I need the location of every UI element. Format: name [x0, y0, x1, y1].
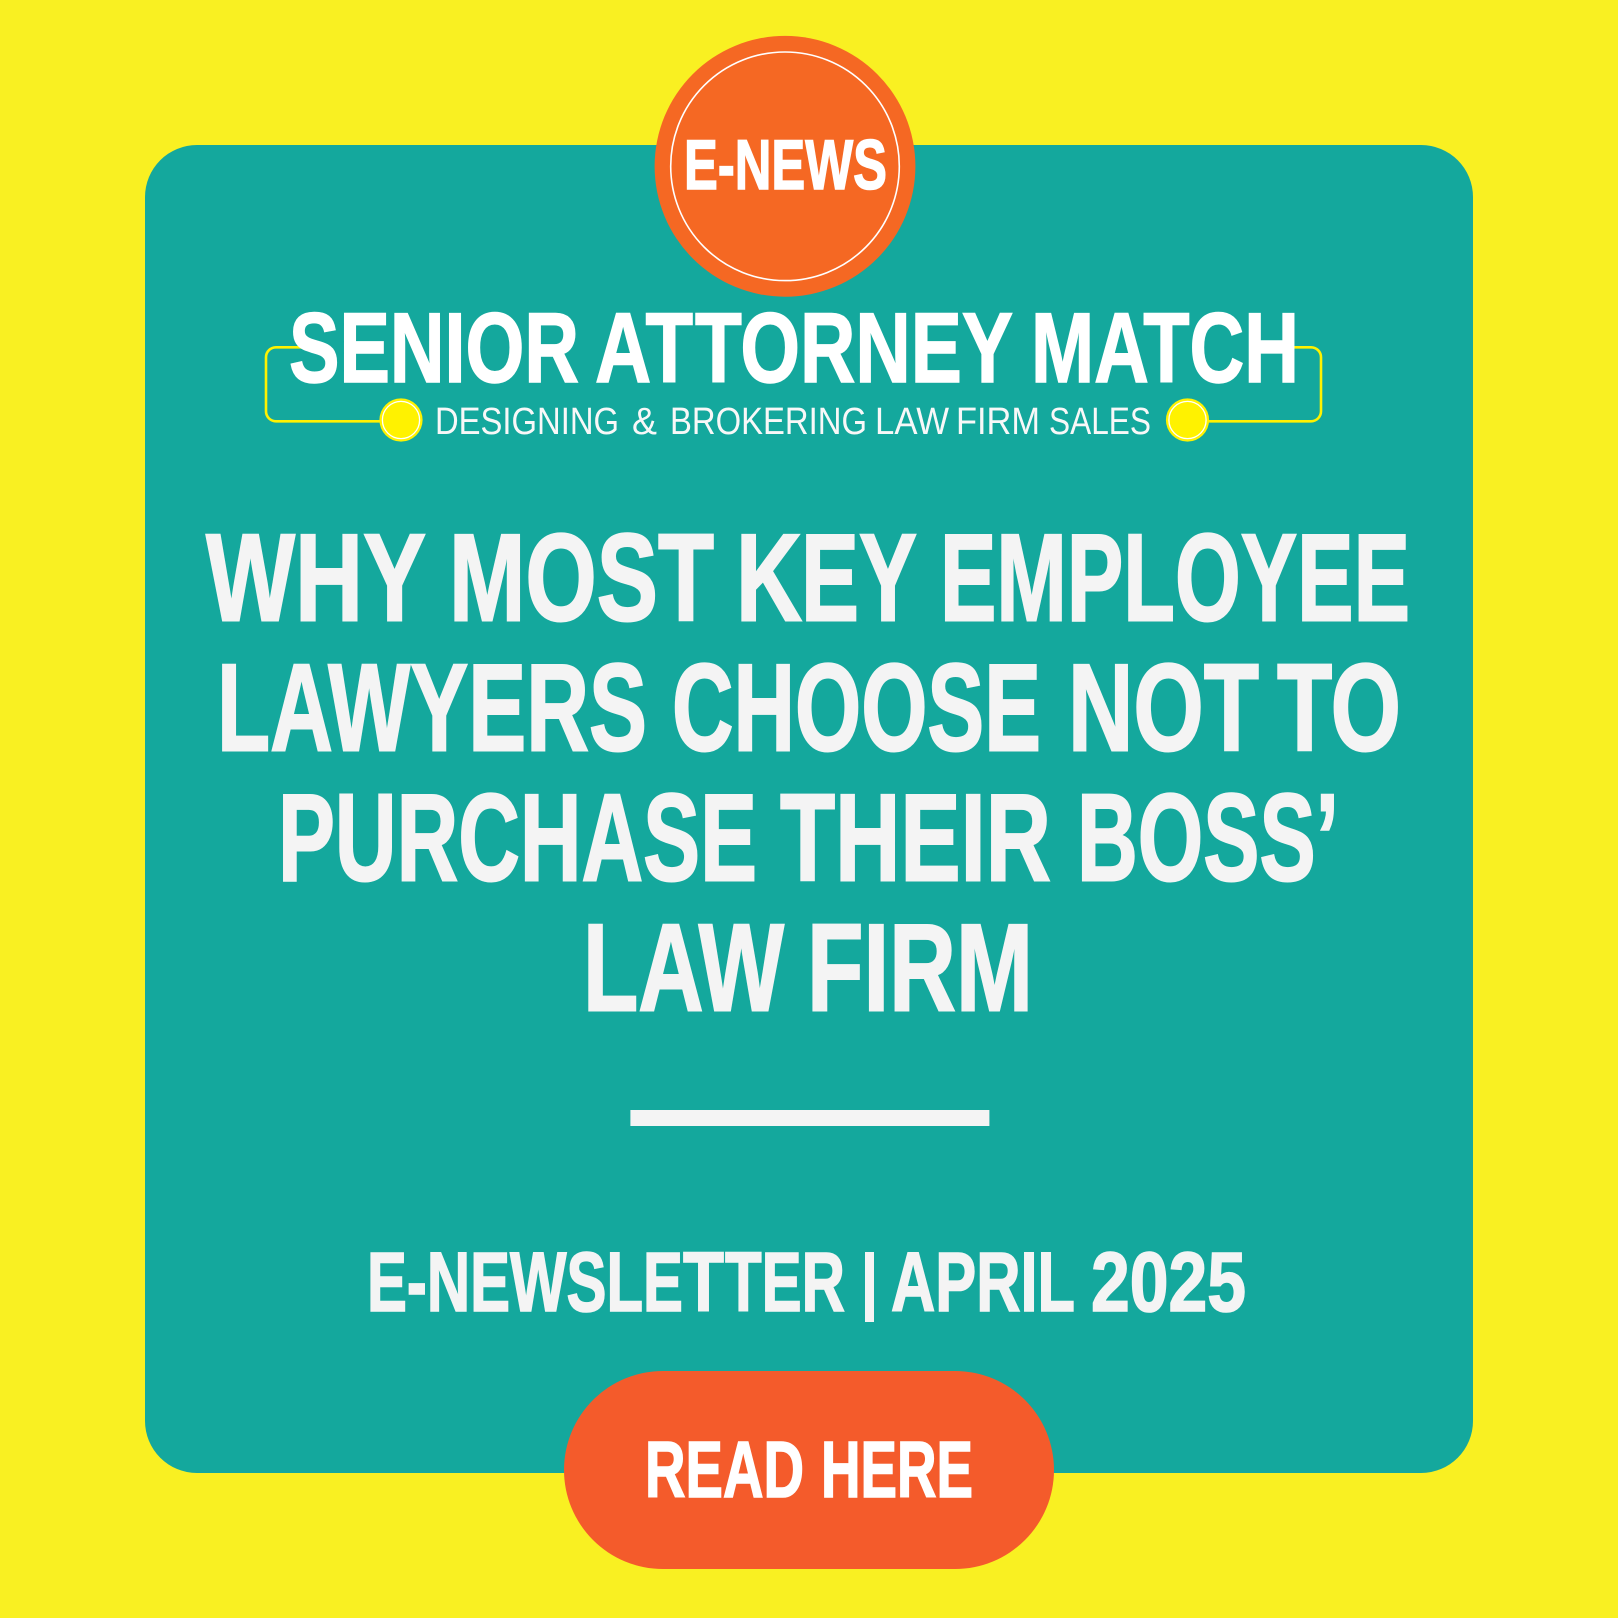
button: Read Here: HERE	[821, 1425, 973, 1514]
button: Read Here: READ	[645, 1425, 804, 1514]
connector: right bracket and dot	[1166, 347, 1321, 442]
date line: 2025	[1091, 1235, 1246, 1329]
connector: left bracket and dot	[266, 347, 423, 442]
headline line 3: BOSS’	[1077, 769, 1339, 908]
headline line 3	[278, 769, 1339, 908]
headline line 1: MOST	[449, 509, 714, 648]
headline line 1	[206, 509, 1410, 648]
badge: E-NEWS	[655, 36, 915, 297]
subheading: tagline: SALES	[1049, 401, 1151, 443]
headline line 2: CHOOSE	[672, 639, 1041, 778]
badge: E-NEWS: E-NEWS	[684, 125, 887, 204]
headline line 4: LAW	[583, 899, 784, 1038]
date line	[367, 1235, 1246, 1329]
heading: Senior Attorney Match	[289, 292, 1299, 403]
subheading: tagline: LAW	[875, 401, 949, 443]
headline line 2: LAWYERS	[217, 639, 647, 778]
headline	[206, 509, 1410, 1038]
headline line 2: NOT	[1068, 639, 1259, 778]
subheading: tagline: BROKERING	[670, 401, 867, 443]
subheading: tagline	[435, 401, 1151, 443]
panel: teal card	[145, 145, 1473, 1473]
headline line 3: PURCHASE	[278, 769, 757, 908]
date line: E-NEWSLE	[367, 1235, 683, 1329]
headline line 1: K	[736, 509, 802, 648]
subheading: tagline: &	[632, 401, 657, 443]
heading: Senior Attorney Match: AT	[595, 292, 693, 403]
headline line 1: EY	[801, 509, 917, 648]
heading: Senior Attorney Match: TORNEY	[695, 292, 1013, 403]
date line: TER	[725, 1235, 845, 1329]
subheading: tagline: FIRM	[956, 401, 1040, 443]
date line: T	[683, 1235, 724, 1329]
headline line 1: EMPLOYEE	[940, 509, 1410, 648]
headline line 1: WHY	[206, 509, 426, 648]
headline line 2	[217, 639, 1401, 778]
headline line 3: THEIR	[780, 769, 1051, 908]
headline line 2: TO	[1277, 639, 1401, 778]
date line: APRIL	[891, 1235, 1075, 1329]
headline line 4: FIRM	[807, 899, 1033, 1038]
heading: Senior Attorney Match: SENIOR	[289, 292, 579, 403]
heading: Senior Attorney Match: MATCH	[1031, 292, 1299, 403]
button: Read Here	[564, 1371, 1054, 1569]
headline line 4	[583, 899, 1033, 1038]
subheading: tagline: DESIGNING	[435, 401, 619, 443]
divider bar	[630, 1110, 989, 1126]
